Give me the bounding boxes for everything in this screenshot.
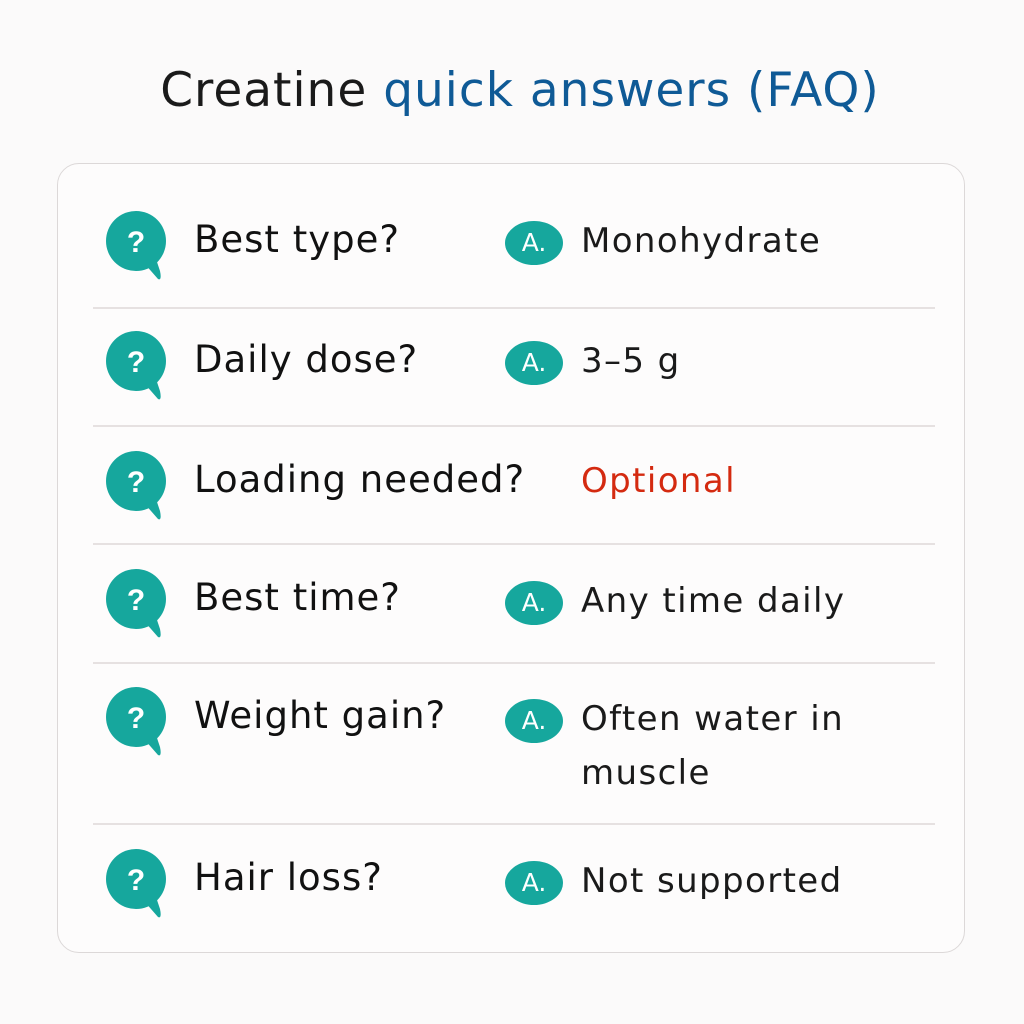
icon: question bubble: ? xyxy=(127,226,145,259)
icon: question bubble: ? xyxy=(127,584,145,617)
question: Best time? xyxy=(194,576,401,619)
answer: Often water in xyxy=(581,699,844,739)
answer: 3–5 g xyxy=(581,341,681,381)
question: Hair loss? xyxy=(194,856,383,899)
icon: question bubble xyxy=(106,849,166,918)
icon: answer badge: A. xyxy=(522,348,546,377)
row: hair loss xyxy=(106,849,843,918)
icon: question bubble: ? xyxy=(127,864,145,897)
row: loading xyxy=(106,451,736,520)
icon: question bubble xyxy=(106,451,166,520)
icon: answer badge: A. xyxy=(522,706,546,735)
row: best type xyxy=(106,211,821,280)
icon: answer badge: A. xyxy=(522,228,546,257)
icon: answer badge xyxy=(505,221,563,265)
icon: question bubble xyxy=(106,569,166,638)
answer: Optional xyxy=(581,461,736,501)
icon: question bubble xyxy=(106,687,166,756)
icon: answer badge xyxy=(505,861,563,905)
answer xyxy=(581,699,844,793)
icon: question bubble: ? xyxy=(127,702,145,735)
icon: answer badge xyxy=(505,699,563,743)
question: Loading needed? xyxy=(194,458,525,501)
question: Daily dose? xyxy=(194,338,418,381)
row: best time xyxy=(106,569,845,638)
answer: Monohydrate xyxy=(581,221,821,261)
title: Creatine quick answers (FAQ) xyxy=(160,63,880,118)
icon: question bubble xyxy=(106,331,166,400)
answer: muscle xyxy=(581,753,711,793)
answer: Any time daily xyxy=(581,581,845,621)
icon: question bubble xyxy=(106,211,166,280)
icon: question bubble: ? xyxy=(127,466,145,499)
icon: answer badge xyxy=(505,341,563,385)
icon: answer badge: A. xyxy=(522,588,546,617)
icon: answer badge: A. xyxy=(522,868,546,897)
row: weight gain xyxy=(106,687,844,793)
answer: Not supported xyxy=(581,861,843,901)
icon: answer badge xyxy=(505,581,563,625)
icon: question bubble: ? xyxy=(127,346,145,379)
panel: FAQ xyxy=(57,163,965,953)
row: daily dose xyxy=(106,331,681,400)
question: Best type? xyxy=(194,218,400,261)
question: Weight gain? xyxy=(194,694,446,737)
